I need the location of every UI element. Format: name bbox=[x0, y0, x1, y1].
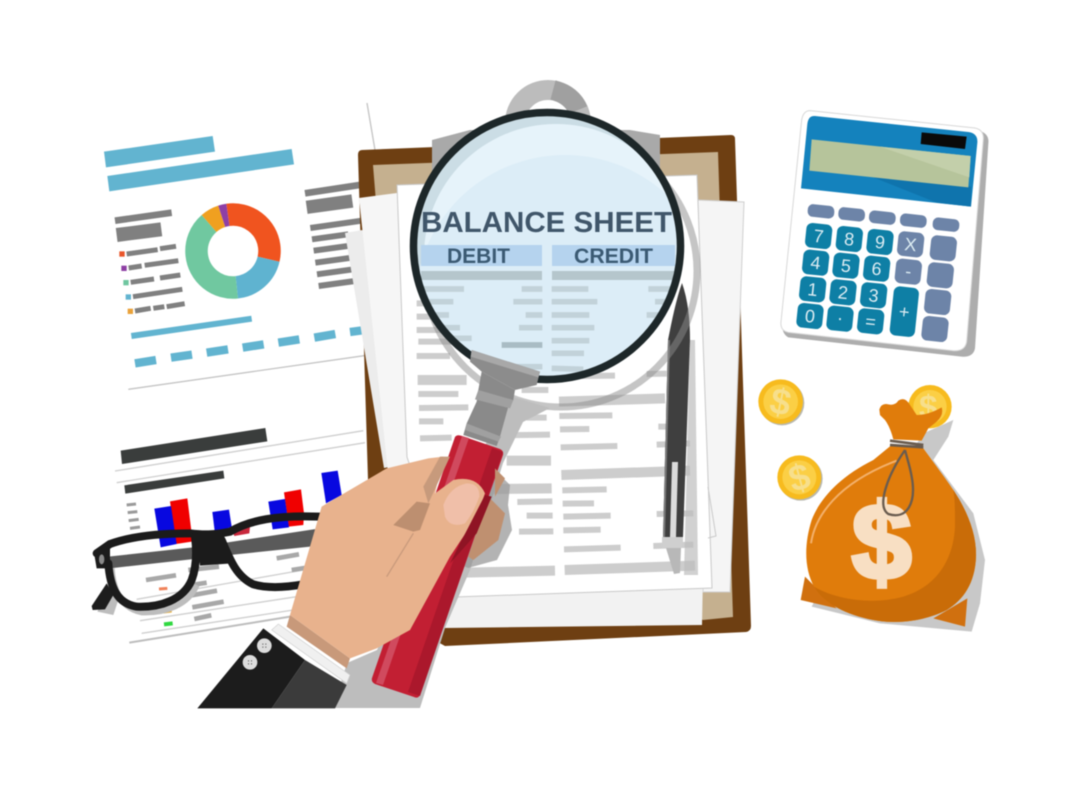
calculator display bbox=[809, 139, 971, 187]
coin left top bbox=[758, 379, 804, 425]
coins and money bag bbox=[758, 379, 985, 632]
lens rim bbox=[414, 112, 680, 380]
right gray text blocks bbox=[305, 185, 362, 286]
sleeve buttons bbox=[243, 638, 272, 670]
report heading bars bbox=[104, 136, 294, 191]
key labels: · bbox=[836, 308, 844, 328]
calculator body bbox=[781, 111, 983, 351]
bag ruffled top bbox=[879, 399, 942, 441]
bag corners bbox=[801, 577, 967, 627]
dark heading bars bbox=[121, 428, 267, 494]
glasses bbox=[92, 516, 320, 615]
coin left bottom bbox=[777, 455, 823, 501]
paper stack bbox=[345, 175, 744, 628]
key labels: 2 bbox=[837, 282, 849, 303]
left sheet bbox=[359, 193, 420, 472]
bag highlight bbox=[811, 461, 897, 543]
clipboard bbox=[358, 90, 751, 646]
thumbnail bbox=[443, 483, 479, 525]
donut chart bbox=[182, 200, 284, 302]
magnifier metal neck bbox=[463, 350, 540, 446]
lens table rows bbox=[415, 289, 675, 369]
key labels: - bbox=[904, 261, 912, 282]
solar panel bbox=[921, 132, 967, 149]
main sheet bbox=[397, 175, 712, 597]
left gray text blocks bbox=[115, 213, 185, 311]
top function keys bbox=[807, 204, 960, 232]
clipboard metal ring bbox=[515, 90, 581, 156]
key labels: 5 bbox=[840, 256, 852, 276]
operator keys bbox=[894, 231, 958, 343]
column label: debit: DEBIT bbox=[447, 245, 510, 268]
hand holding magnifier bbox=[287, 457, 505, 668]
column label: credit: CREDIT bbox=[574, 245, 653, 268]
lens table header bars bbox=[421, 245, 542, 266]
pen bbox=[662, 283, 698, 575]
report page with bar chart bbox=[115, 428, 365, 643]
pen body bbox=[663, 283, 690, 537]
palm and thumb bbox=[290, 457, 485, 658]
clip plate bbox=[432, 130, 660, 172]
coin left top: $ bbox=[766, 380, 795, 424]
wrist bbox=[287, 615, 350, 668]
lens glass bbox=[416, 116, 677, 376]
dollar sign: $ bbox=[852, 482, 911, 602]
blue underline and dashes bbox=[131, 319, 365, 363]
key labels: + bbox=[898, 302, 911, 322]
sheet table rows bbox=[417, 303, 695, 573]
magnifying lens bbox=[408, 108, 686, 384]
key labels: 7 bbox=[813, 226, 825, 247]
magnifier shadow bbox=[333, 135, 697, 708]
calculator blue header bbox=[801, 116, 977, 207]
clipboard tan inner bbox=[373, 152, 733, 620]
key labels: 6 bbox=[871, 259, 883, 279]
key labels: 9 bbox=[874, 232, 886, 253]
key labels: 8 bbox=[843, 229, 855, 250]
suit sleeve bbox=[197, 624, 350, 708]
key labels: 4 bbox=[810, 253, 822, 273]
bag rope bbox=[883, 441, 923, 515]
bar chart columns bbox=[154, 471, 342, 547]
far left sheet bbox=[345, 230, 425, 468]
glasses bridge bbox=[197, 533, 232, 566]
calculator shadow bbox=[782, 113, 988, 357]
coin in bag bbox=[908, 385, 952, 428]
number keys bbox=[796, 222, 920, 338]
donut legend swatches bbox=[119, 251, 133, 314]
key labels bbox=[804, 226, 918, 332]
calculator bbox=[781, 111, 988, 357]
magnifying glass grip bbox=[372, 435, 503, 698]
key labels: X bbox=[904, 234, 918, 255]
key labels: = bbox=[864, 311, 877, 332]
right sheet bbox=[698, 200, 744, 592]
pen tip bbox=[662, 537, 683, 548]
bag shadow bbox=[812, 420, 985, 632]
fingers behind handle bbox=[468, 468, 505, 560]
illustration: balance sheet desk scene bbox=[91, 80, 989, 710]
lower sheet bbox=[430, 575, 703, 628]
clipboard board bbox=[358, 135, 751, 646]
glasses arm bbox=[92, 583, 113, 610]
glasses temple band bbox=[108, 528, 320, 568]
key labels: 3 bbox=[868, 285, 880, 306]
shirt cuff bbox=[272, 624, 350, 683]
pen clip bbox=[670, 462, 678, 537]
heading: balance sheet: BALANCE SHEET bbox=[421, 207, 672, 239]
coin in bag: $ bbox=[919, 389, 938, 426]
coin left bottom: $ bbox=[784, 455, 815, 500]
key labels: 1 bbox=[807, 279, 819, 300]
report page with donut chart bbox=[104, 103, 375, 389]
key labels: 0 bbox=[804, 306, 816, 327]
glasses frame bbox=[97, 516, 320, 607]
bag body bbox=[806, 445, 976, 622]
